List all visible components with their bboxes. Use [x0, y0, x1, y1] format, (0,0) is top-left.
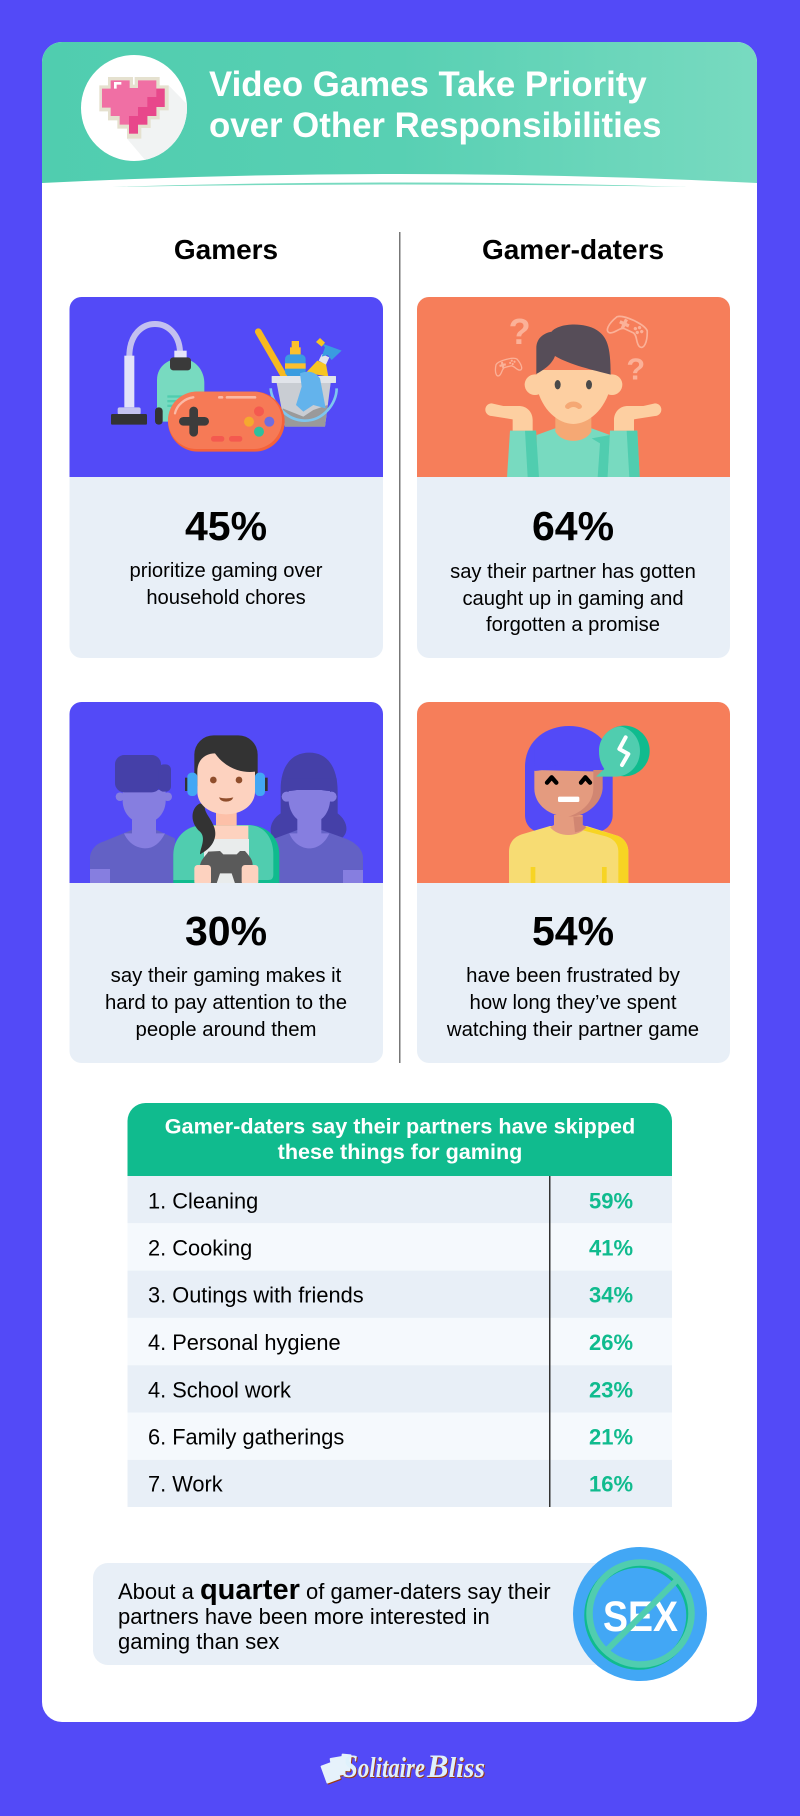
table header [128, 1103, 672, 1176]
stat: 64%: 64% [532, 503, 614, 549]
stat: 45%: 45% [185, 503, 267, 549]
table rows [128, 1176, 672, 1507]
stat text: household chores [146, 587, 306, 609]
table labels: 4. School work [148, 1378, 291, 1402]
callout text: gaming than sex [118, 1629, 279, 1654]
heading: Gamer-daters: Gamer-daters [482, 234, 664, 265]
stat text: how long they’ve spent [470, 992, 677, 1014]
callout: quarter of gamer-daters [93, 1563, 623, 1665]
table labels: 4. Personal hygiene [148, 1330, 341, 1355]
title [209, 65, 661, 145]
stat text: prioritize gaming over [130, 560, 323, 582]
callout text: About a quarter of gamer-daters say their [118, 1574, 551, 1606]
table: skipped responsibilities [128, 1103, 672, 1507]
table labels: 6. Family gatherings [148, 1424, 344, 1450]
illustration: girl gaming between ignored friends [70, 702, 383, 885]
table values: 59% [589, 1188, 633, 1214]
logo: Solitaire Bliss: Bliss [426, 1749, 485, 1785]
panel: gamers 30% [70, 702, 383, 1063]
callout text: partners have been more interested in [118, 1604, 490, 1629]
table values: 26% [589, 1330, 633, 1355]
logo: Solitaire Bliss [320, 1749, 485, 1785]
illustration: confused man [417, 297, 730, 477]
stat: 54%: 54% [532, 908, 614, 954]
table values: 41% [589, 1236, 633, 1260]
illustration: confused man: ? [509, 311, 531, 352]
stat text: watching their partner game [446, 1019, 699, 1041]
stat text: hard to pay attention to the [105, 992, 347, 1014]
stat text: say their partner has gotten [450, 561, 696, 583]
stat text: caught up in gaming and [462, 588, 684, 610]
stat text: people around them [136, 1019, 316, 1041]
title: over Other Responsibilities [209, 106, 661, 145]
stat: 30%: 30% [185, 908, 267, 954]
stat text: have been frustrated by [466, 965, 681, 987]
column divider [399, 232, 400, 1063]
illustration: frustrated woman with speech bubble [417, 702, 730, 883]
stat text: forgotten a promise [486, 614, 660, 636]
header banner [42, 42, 757, 187]
illustration: vacuum, gamepad and cleaning bucket [70, 297, 383, 477]
panel: gamer-daters 64% [417, 297, 730, 658]
table labels [148, 1188, 364, 1496]
logo: Solitaire Bliss: Solitaire [343, 1749, 425, 1785]
heading: Gamers: Gamers [174, 234, 278, 265]
table labels: 1. Cleaning [148, 1188, 258, 1214]
table labels: 3. Outings with friends [148, 1282, 364, 1308]
table labels: 2. Cooking [148, 1236, 252, 1260]
stat text [105, 965, 347, 1041]
icon: pixel heart in circle [81, 55, 193, 165]
icon: no sex sign: SEX [603, 1593, 678, 1641]
table values: 21% [589, 1424, 633, 1450]
table labels: 7. Work [148, 1472, 223, 1496]
table header: these things for gaming [278, 1139, 522, 1164]
table values: 16% [589, 1472, 633, 1496]
stat text [446, 965, 699, 1041]
table values: 34% [589, 1282, 633, 1308]
stat text [130, 560, 323, 609]
panel: gamer-daters 54% [417, 702, 730, 1063]
icon: no sex sign [573, 1547, 707, 1681]
stat text: say their gaming makes it [111, 965, 342, 987]
table header: Gamer-daters say their partners have skipped [165, 1114, 635, 1138]
illustration: confused man: ? [626, 353, 645, 387]
callout text [118, 1574, 551, 1654]
panel: gamers 45% [70, 297, 383, 658]
table values [589, 1188, 633, 1496]
title: Video Games Take Priority [209, 65, 647, 104]
table values: 23% [589, 1378, 633, 1402]
stat text [450, 561, 696, 636]
